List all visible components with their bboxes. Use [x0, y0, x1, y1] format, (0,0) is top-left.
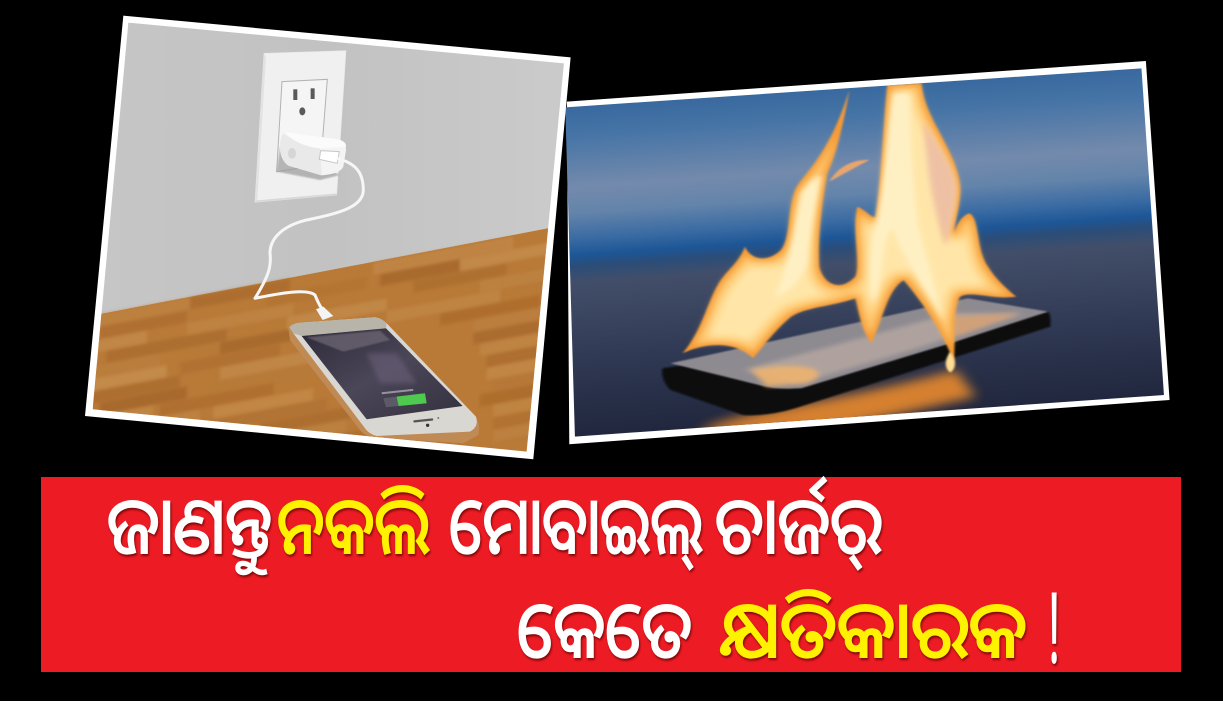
phone screen	[671, 298, 1048, 389]
battery indicator	[384, 396, 398, 408]
flames	[683, 83, 1016, 373]
photo scene	[92, 22, 564, 452]
red title banner	[41, 470, 1181, 691]
photo: phone charging	[85, 16, 571, 460]
headline line 1: ମୋବାଇଲ୍	[449, 470, 703, 576]
sky and table	[566, 68, 1164, 437]
headline line 1: ନକଲି	[277, 470, 430, 576]
cable connector	[316, 307, 333, 320]
wall	[80, 13, 580, 347]
flame outer	[683, 83, 1016, 363]
headline line 1: ଚାର୍ଜର୍	[715, 470, 882, 576]
flame core	[704, 88, 990, 345]
red title banner: !	[1046, 560, 1061, 691]
phone body	[662, 298, 1051, 415]
headline line 1: ଜାଣନ୍ତୁ	[107, 470, 272, 576]
headline line 1	[107, 470, 882, 576]
flame core center	[870, 93, 946, 323]
wall plate	[255, 51, 346, 202]
flame lilac highlight	[924, 120, 957, 247]
socket	[277, 79, 327, 172]
photo frame	[567, 61, 1170, 444]
headline line 2: କ୍ଷତିକାରକ	[719, 574, 1027, 680]
phone	[288, 317, 479, 443]
home button	[413, 418, 433, 423]
charger	[277, 132, 346, 180]
photo frame	[85, 16, 571, 459]
table reflection	[699, 370, 976, 433]
headline line 2	[517, 560, 1061, 691]
charging cable	[255, 158, 363, 317]
photo: burning phone	[566, 61, 1170, 444]
phone screen	[302, 328, 463, 419]
flame left core	[775, 176, 821, 297]
photo scene	[566, 68, 1164, 437]
flame drip	[946, 352, 955, 373]
wood floor	[92, 228, 548, 452]
flame wisp	[829, 160, 869, 182]
flame mid	[683, 83, 1016, 363]
headline line 2: କେତେ	[517, 574, 692, 680]
